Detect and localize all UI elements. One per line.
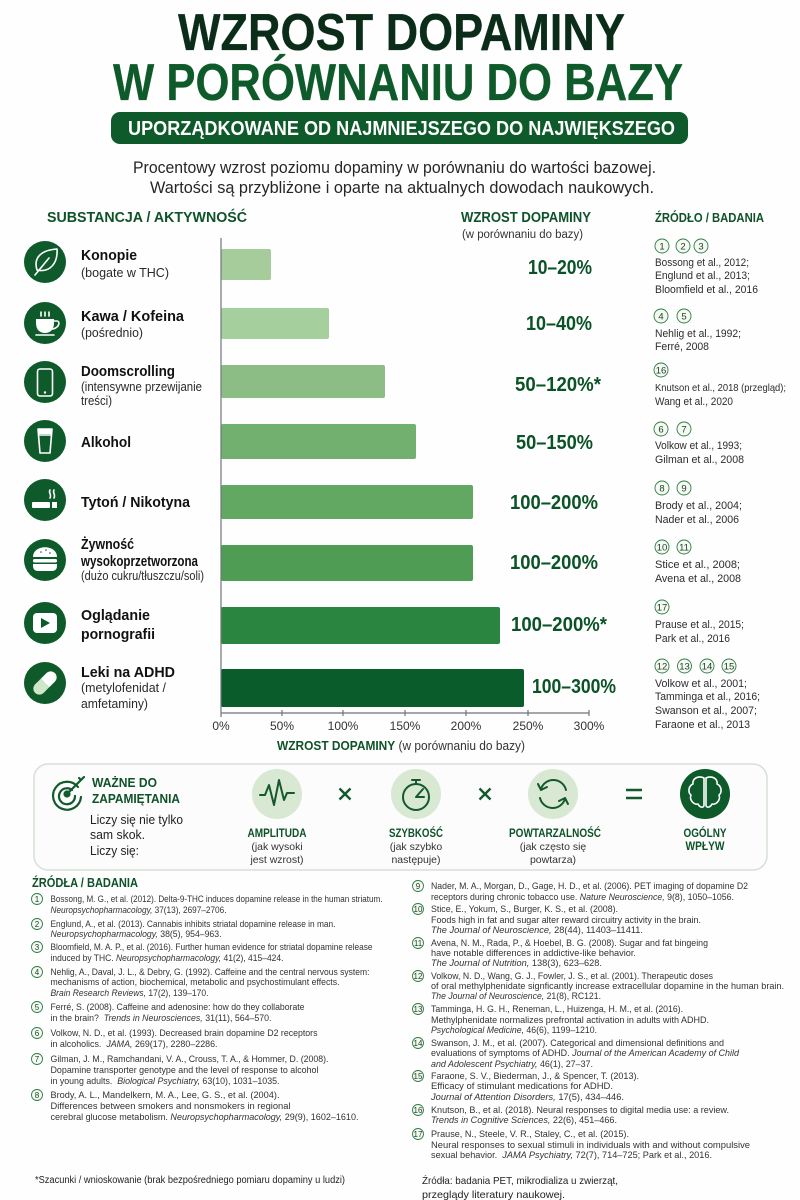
sources: Zywnosc: Avena et al., 2008	[655, 573, 741, 585]
references: right column: Psychological Medicine, 46(6), 1199–1210.	[431, 1025, 597, 1036]
column headings	[47, 208, 764, 241]
references: right column: The Journal of Neuroscience, 28(44), 11403–11411.	[431, 925, 643, 936]
row: Alkohol: Alkohol	[81, 434, 131, 451]
references: left column: Bossong, M. G., et al. (2012). Delta-9-THC induces dopamine release in the human striatum.	[50, 894, 382, 905]
row: Konopie	[24, 239, 758, 296]
sources: Kawa: 4	[658, 312, 664, 322]
intro text: Wartości są przybliżone i oparte na aktualnych dowodach naukowych.	[150, 178, 654, 197]
row: Konopie: (bogate w THC)	[81, 266, 169, 280]
sources: Alkohol: Volkow et al., 1993;	[655, 440, 742, 452]
factor: amplitude: AMPLITUDA	[248, 826, 307, 840]
sources: Kawa: 5	[681, 312, 687, 322]
references: left column: Brody, A. L., Mandelkern, M. A., Lee, G. S., et al. (2004).	[50, 1090, 280, 1101]
references: left column: Ferré, S. (2008). Caffeine and adenosine: how do they collaborate	[50, 1002, 304, 1013]
bar chart: WZROST DOPAMINY (w porównaniu do bazy)	[277, 739, 525, 753]
references: left column: 8	[35, 1091, 40, 1100]
references: left column: Volkow, N. D., et al. (1993). Decreased brain dopamine D2 receptors	[50, 1028, 318, 1039]
sources: Tyton: Nader et al., 2006	[655, 514, 739, 526]
sources: Leki: Swanson et al., 2007;	[655, 705, 757, 717]
intro text: Procentowy wzrost poziomu dopaminy w porównaniu do wartości bazowej.	[133, 158, 656, 177]
sources: Zywnosc: 10	[657, 542, 667, 554]
row: Ogladanie: pornografii	[81, 626, 155, 643]
icon: pill	[24, 662, 66, 704]
references: left column	[32, 894, 382, 1123]
factor: speed: następuje)	[391, 854, 441, 866]
subtitle pill	[111, 112, 688, 144]
sources: Zywnosc: Stice et al., 2008;	[655, 559, 740, 571]
sources: Tyton: 9	[681, 484, 687, 494]
column headings: (w porównaniu do bazy)	[462, 229, 583, 241]
references: left column: mechanisms of action, biochemical, metabolic and psychostimulant effects.	[50, 977, 340, 988]
sources: Leki: Faraone et al., 2013	[655, 719, 750, 731]
references: right column: Neural responses to sexual stimuli in individuals with and without compulsive	[431, 1140, 750, 1151]
references: right column: 12	[414, 972, 423, 981]
factor: amplitude	[248, 769, 307, 866]
row: Leki: Leki na ADHD	[81, 664, 175, 681]
references: right column: Swanson, J. M., et al. (2007). Categorical and dimensional definitions and	[431, 1038, 724, 1049]
references: right column: Trends in Cognitive Sciences, 22(6), 451–466.	[431, 1115, 617, 1126]
references: right column: evaluations of symptoms of ADHD. Journal of the American Academy of Child	[431, 1048, 740, 1059]
references: right column: Avena, N. M., Rada, P., & Hoebel, B. G. (2008). Sugar and fat bingeing	[431, 938, 708, 949]
references: left column: Bloomfield, M. A. P., et al. (2016). Further human evidence for striatal dopamine release	[50, 942, 372, 953]
panel: key takeaway	[34, 764, 767, 870]
title: W PORÓWNANIU DO BAZY	[113, 54, 683, 112]
icon: phone	[24, 361, 66, 403]
row: Alkohol: 50–150%	[516, 432, 593, 454]
references: right column: 11	[414, 939, 423, 948]
references: left column: Nehlig, A., Daval, J. L., & Debry, G. (1992). Caffeine and the central nervous system:	[50, 967, 370, 978]
row: Kawa: Kawa / Kofeina	[81, 308, 185, 325]
row: Konopie: 10–20%	[528, 257, 592, 279]
references: left column: Englund, A., et al. (2013). Cannabis inhibits striatal dopamine release in man.	[50, 919, 336, 930]
takeaway heading: ZAPAMIĘTANIA	[92, 791, 181, 806]
references: left column: 2	[35, 920, 40, 929]
references: left column: 7	[35, 1055, 40, 1064]
row: Doomscrolling: Doomscrolling	[81, 363, 175, 380]
row: Alkohol	[24, 420, 744, 466]
references: right column: 17	[414, 1130, 423, 1139]
sources: Doomscrolling: Knutson et al., 2018 (przegląd);	[655, 383, 786, 394]
row: Zywnosc: wysokoprzetworzona	[80, 553, 198, 570]
bar chart: 0%	[212, 719, 230, 733]
sources: Konopie: 3	[698, 242, 704, 252]
references: right column: The Journal of Neuroscience, 21(8), RC121.	[431, 991, 601, 1002]
icon: beer glass	[24, 420, 66, 462]
references: left column: in alcoholics. JAMA, 269(17), 2280–2286.	[50, 1039, 217, 1050]
row: Kawa: (pośrednio)	[81, 326, 143, 340]
sources: Kawa: Nehlig et al., 1992;	[655, 328, 741, 340]
row: Doomscrolling: treści)	[81, 394, 112, 408]
result: overall impact: OGÓLNY	[684, 825, 726, 840]
references: right column: 9	[416, 882, 421, 891]
sources: Leki: 14	[702, 662, 712, 672]
title	[113, 4, 683, 112]
row: Konopie: Konopie	[81, 247, 137, 264]
sources: Leki: Tamminga et al., 2016;	[655, 691, 760, 703]
sources: Alkohol	[654, 422, 744, 466]
sources: Leki	[655, 659, 760, 731]
row: Ogladanie: Oglądanie	[81, 607, 150, 624]
icon: cigarette	[24, 479, 66, 521]
bar chart: 300%	[574, 719, 605, 733]
sources: Alkohol: 6	[658, 424, 664, 436]
sources: Konopie: Bloomfield et al., 2016	[655, 284, 758, 296]
references: right column: Efficacy of stimulant medications for ADHD.	[431, 1081, 613, 1092]
subtitle pill: UPORZĄDKOWANE OD NAJMNIEJSZEGO DO NAJWIĘKSZEGO	[128, 118, 675, 140]
row: Tyton: 100–200%	[510, 492, 598, 514]
row: Leki	[24, 659, 760, 731]
sources: Kawa: Ferré, 2008	[655, 341, 709, 353]
references: right column: of oral methylphenidate signficantly increase extracellular dopamine in the human brain.	[431, 981, 784, 992]
sources: Doomscrolling	[654, 363, 786, 408]
sources: Leki: 12	[657, 662, 667, 672]
sources: Kawa	[654, 309, 741, 353]
references: right column: receptors during chronic tobacco use. Nature Neuroscience, 9(8), 1050–1056.	[431, 892, 734, 903]
footnote: evidence types	[422, 1174, 618, 1200]
sources: Alkohol: 7	[681, 424, 687, 436]
icon: burger	[24, 539, 66, 581]
references: right column: Nader, M. A., Morgan, D., Gage, H. D., et al. (2006). PET imaging of dopamine D2	[431, 881, 748, 892]
references: right column: Journal of Attention Disorders, 17(5), 434–446.	[430, 1092, 624, 1103]
references: right column: 13	[414, 1005, 423, 1014]
takeaway heading	[92, 775, 181, 806]
bar chart: 50%	[270, 719, 294, 733]
row: Leki: (metylofenidat /	[81, 681, 167, 695]
references: right column	[412, 880, 784, 1161]
sources: Ogladanie	[655, 600, 744, 645]
references: right column: Faraone, S. V., Biederman, J., & Spencer, T. (2013).	[431, 1071, 639, 1082]
factor: repeatability: powtarza)	[530, 854, 576, 866]
takeaway text	[90, 813, 183, 858]
row: Doomscrolling: (intensywne przewijanie	[81, 380, 202, 394]
references heading: ŹRÓDŁA / BADANIA	[32, 875, 138, 890]
references: left column: Differences between smokers and nonsmokers in regional	[50, 1101, 290, 1112]
footnote: estimates: *Szacunki / wnioskowanie (brak bezpośredniego pomiaru dopaminy u ludzi)	[35, 1175, 345, 1186]
factor: speed	[389, 769, 443, 866]
row: Leki: 100–300%	[532, 676, 616, 698]
takeaway heading: WAŻNE DO	[92, 775, 157, 790]
row: Zywnosc: (dużo cukru/tłuszczu/soli)	[81, 569, 204, 583]
factor: amplitude: jest wzrost)	[249, 854, 304, 866]
factor: repeatability: (jak często się	[520, 841, 586, 853]
references: left column: in young adults. Biological Psychiatry, 63(10), 1031–1035.	[50, 1076, 280, 1087]
references: left column: 6	[35, 1029, 40, 1038]
column headings: WZROST DOPAMINY	[461, 210, 591, 226]
references: right column: The Journal of Nutrition, 138(3), 623–628.	[431, 958, 602, 969]
bar chart	[212, 238, 605, 753]
row: Kawa	[24, 302, 741, 353]
references: right column: Prause, N., Steele, V. R., Staley, C., et al. (2015).	[431, 1129, 629, 1140]
references: left column: induced by THC. Neuropsychopharmacology, 41(2), 415–424.	[50, 953, 284, 964]
references: left column: 1	[35, 895, 40, 904]
sources: Ogladanie: 17	[657, 602, 667, 614]
row: Zywnosc: 100–200%	[510, 552, 598, 574]
references: right column: Stice, E., Yokum, S., Burger, K. S., et al. (2008).	[431, 904, 618, 915]
row: Zywnosc	[24, 536, 741, 585]
factor: speed: (jak szybko	[390, 841, 442, 853]
sources: Konopie: Bossong et al., 2012;	[655, 257, 749, 269]
references: left column: Dopamine transporter genotype and the level of response to alcohol	[50, 1065, 318, 1076]
result: overall impact: WPŁYW	[686, 839, 725, 853]
icon: leaf	[24, 241, 66, 283]
row: Ogladanie	[24, 600, 744, 645]
references: left column: Brain Research Reviews, 17(2), 139–170.	[50, 988, 208, 999]
sources: Tyton: 8	[659, 484, 665, 494]
result: overall impact	[680, 769, 730, 853]
row: Tyton: Tytoń / Nikotyna	[81, 494, 191, 511]
references: right column: Foods high in fat and sugar alter reward circuitry activity in the brain.	[431, 915, 701, 926]
intro text	[133, 158, 656, 197]
column headings: SUBSTANCJA / AKTYWNOŚĆ	[47, 208, 248, 226]
factor: repeatability	[509, 769, 601, 866]
references: left column: Neuropsychopharmacology, 37(13), 2697–2706.	[50, 905, 226, 916]
sources: Konopie: 2	[680, 242, 686, 252]
title: WZROST DOPAMINY	[178, 4, 625, 62]
references: left column: 5	[35, 1003, 40, 1012]
factor: amplitude: (jak wysoki	[251, 841, 303, 853]
row: Doomscrolling	[24, 361, 786, 408]
references: right column: Methylphenidate normalizes prefrontal activation in adults with ADHD.	[431, 1015, 709, 1026]
references: left column: 3	[35, 943, 40, 952]
bar chart: 100%	[328, 719, 359, 733]
sources: Konopie: Englund et al., 2013;	[655, 270, 750, 282]
references: left column: Gilman, J. M., Ramchandani, V. A., Crouss, T. A., & Hommer, D. (2008).	[50, 1054, 328, 1065]
references: right column: Knutson, B., et al. (2018). Neural responses to digital media use: a review.	[431, 1105, 729, 1116]
sources: Konopie	[655, 239, 758, 296]
row: Kawa: 10–40%	[526, 313, 592, 335]
sources: Zywnosc: 11	[679, 542, 689, 554]
sources: Konopie: 1	[659, 242, 665, 252]
row: Doomscrolling: 50–120%*	[515, 374, 601, 396]
bar chart: 150%	[390, 719, 421, 733]
icon: coffee cup	[24, 302, 66, 344]
sources: Zywnosc	[655, 540, 741, 585]
factor: repeatability: POWTARZALNOŚĆ	[509, 825, 601, 840]
references: left column: in the brain? Trends in Neurosciences, 31(11), 564–570.	[50, 1013, 272, 1024]
references: right column: and Adolescent Psychiatry, 46(1), 27–37.	[431, 1059, 593, 1070]
column headings: ŹRÓDŁO / BADANIA	[655, 210, 764, 225]
takeaway text: Liczy się nie tylko	[90, 813, 183, 827]
multiply sign	[340, 788, 350, 800]
sources: Leki: 15	[724, 662, 734, 672]
takeaway text: sam skok.	[90, 828, 145, 842]
references: right column: 10	[414, 905, 423, 914]
references: right column: 15	[414, 1072, 423, 1081]
references: right column: Volkow, N. D., Wang, G. J., Fowler, J. S., et al. (2001). Therapeutic doses	[431, 971, 713, 982]
references: left column: 4	[35, 968, 40, 977]
sources: Ogladanie: Prause et al., 2015;	[655, 619, 744, 631]
references: right column: have notable differences in addictive-like behavior.	[431, 948, 636, 959]
icon: target	[53, 777, 84, 810]
sources: Leki: Volkow et al., 2001;	[655, 678, 747, 690]
row: Ogladanie: 100–200%*	[511, 614, 607, 636]
row: Leki: amfetaminy)	[81, 697, 148, 711]
bar chart: 250%	[513, 719, 544, 733]
references: left column: Neuropsychopharmacology, 38(5), 954–963.	[50, 929, 222, 940]
multiply sign	[480, 788, 490, 800]
references: left column: cerebral glucose metabolism. Neuropsychopharmacology, 29(9), 1602–1610.	[50, 1112, 358, 1123]
references: right column: 16	[414, 1106, 423, 1115]
row: Zywnosc: Żywność	[81, 536, 134, 553]
references: right column: Tamminga, H. G. H., Reneman, L., Huizenga, H. M., et al. (2016).	[431, 1004, 683, 1015]
sources: Tyton: Brody et al., 2004;	[655, 500, 742, 512]
sources: Alkohol: Gilman et al., 2008	[655, 454, 744, 466]
factor: speed: SZYBKOŚĆ	[389, 825, 443, 840]
sources: Tyton	[655, 481, 742, 526]
takeaway text: Liczy się:	[90, 844, 139, 858]
sources: Ogladanie: Park et al., 2016	[655, 633, 730, 645]
references: right column: sexual behavior. JAMA Psychiatry, 72(7), 714–725; Park et al., 2016.	[431, 1150, 712, 1161]
footnote: evidence types: Źródła: badania PET, mikrodializa u zwierząt,	[422, 1174, 618, 1187]
equals sign	[626, 790, 642, 798]
bar chart: 200%	[451, 719, 482, 733]
icon: play button	[24, 602, 66, 644]
sources: Doomscrolling: Wang et al., 2020	[655, 396, 733, 408]
sources: Doomscrolling: 16	[656, 366, 666, 376]
row: Tyton	[24, 479, 742, 526]
sources: Leki: 13	[679, 662, 690, 672]
references: right column: 14	[414, 1039, 423, 1048]
